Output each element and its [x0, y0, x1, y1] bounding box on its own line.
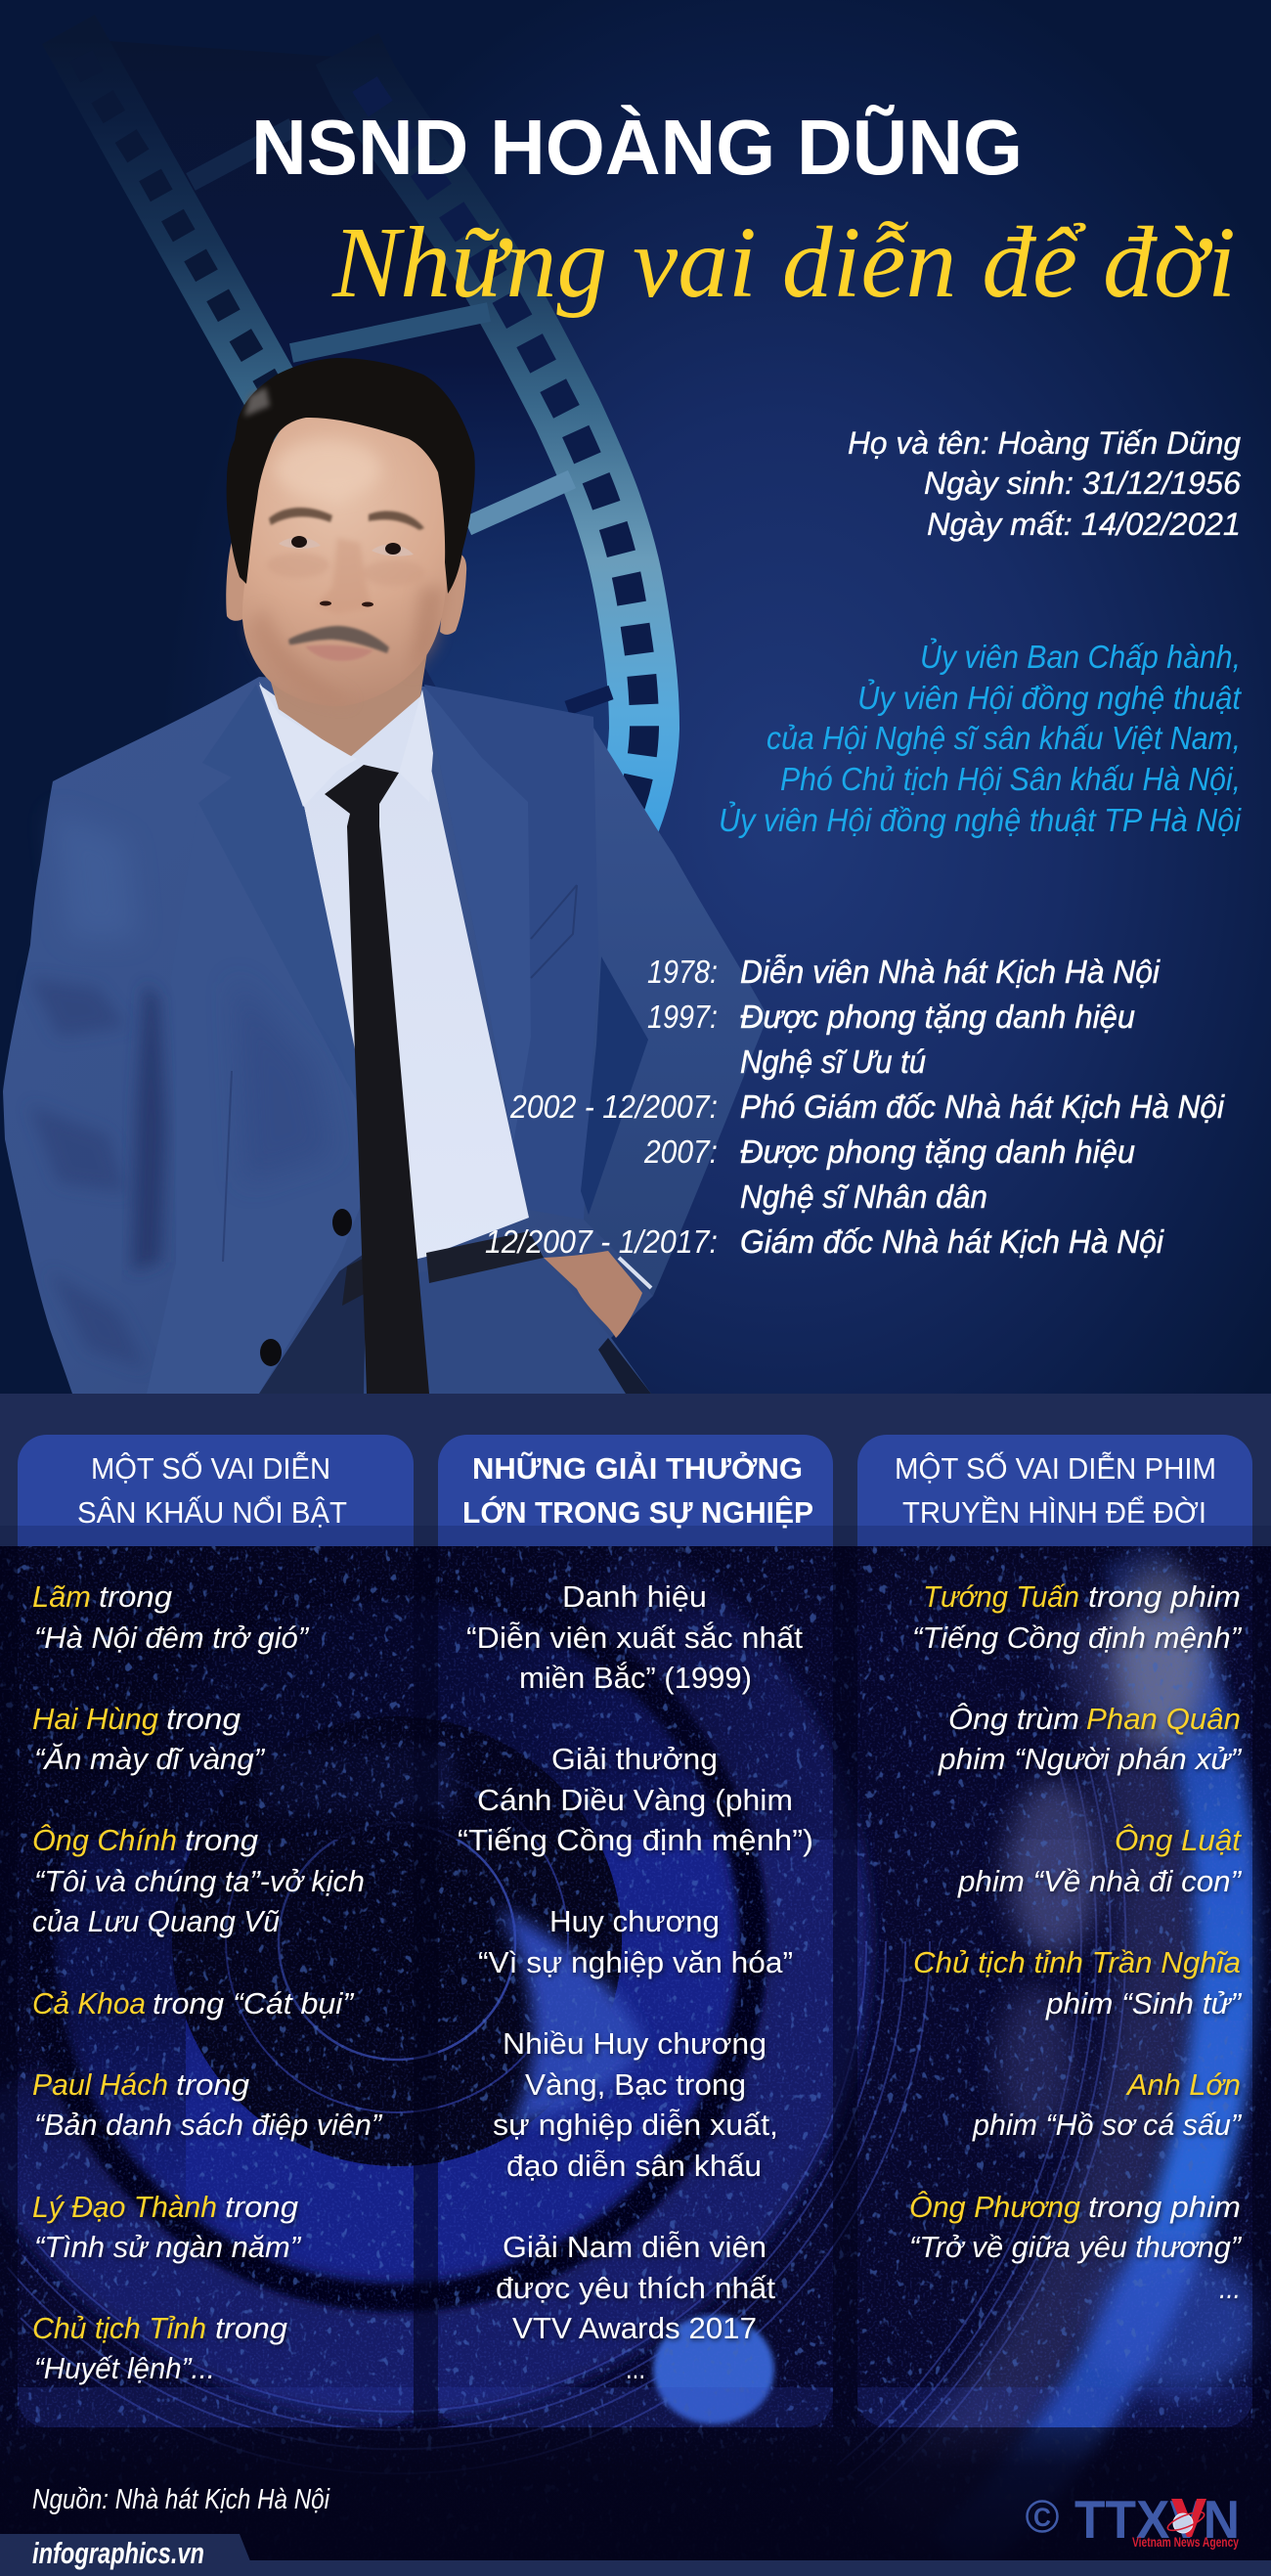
positions held: của Hội Nghệ sĩ sân khấu Việt Nam,	[767, 720, 1241, 756]
positions held	[719, 638, 1243, 838]
translucent column tails	[18, 2387, 1252, 2427]
arm gap showing background	[581, 956, 648, 1215]
awards list: “Vì sự nghiệp văn hóa”	[478, 1945, 793, 1979]
nose	[315, 538, 372, 614]
television roles list: ...	[1219, 2271, 1241, 2305]
face	[242, 391, 448, 706]
stage roles list: trong	[176, 2067, 249, 2102]
bottom strip	[0, 2560, 1271, 2576]
left lapel and jacket front	[150, 806, 332, 1394]
film strip decoration	[68, 29, 644, 831]
pants	[611, 1338, 650, 1393]
moustache	[288, 626, 389, 653]
subtitle: Những vai diễn để đời	[331, 206, 1236, 319]
awards list: Huy chương	[549, 1904, 720, 1938]
stage roles list: trong	[215, 2311, 287, 2345]
stage roles list: “Huyết lệnh”...	[34, 2351, 215, 2385]
television roles list: Tướng Tuấn	[923, 1579, 1079, 1614]
stage roles list: trong “Cát bụi”	[153, 1986, 355, 2021]
column gaps	[0, 1546, 1271, 2427]
awards list: Nhiều Huy chương	[503, 2026, 767, 2061]
career timeline: 1997:	[647, 999, 718, 1035]
stage roles list: Paul Hách	[32, 2067, 168, 2102]
television roles list: phim “Người phán xử”	[938, 1742, 1243, 1776]
stage roles list: trong	[225, 2190, 298, 2224]
awards list: Vàng, Bạc trong	[525, 2067, 746, 2102]
television roles list: Ông Phương	[909, 2190, 1080, 2224]
career timeline: 2007:	[643, 1133, 718, 1170]
positions held: Ủy viên Ban Chấp hành,	[920, 638, 1241, 675]
column headings: NHỮNG GIẢI THƯỞNG	[472, 1450, 803, 1486]
stage roles list: trong	[185, 1823, 258, 1857]
grey flare streaks	[1113, 1560, 1206, 1746]
column headings: SÂN KHẤU NỔI BẬT	[77, 1494, 347, 1530]
television roles list: trong phim	[1088, 2190, 1241, 2224]
career timeline	[485, 954, 1226, 1260]
jacket body and sleeves	[3, 677, 653, 1394]
awards list: Danh hiệu	[562, 1579, 707, 1614]
hero background	[0, 0, 1271, 1394]
shirt	[259, 685, 529, 1271]
portrait: Hoàng Dũng	[3, 358, 766, 1394]
stage roles list: “Hà Nội đêm trở gió”	[34, 1621, 310, 1655]
ears	[226, 538, 466, 635]
career timeline: Được phong tặng danh hiệu	[740, 1133, 1135, 1170]
career timeline: Giám đốc Nhà hát Kịch Hà Nội	[740, 1223, 1165, 1260]
television roles list	[909, 1579, 1243, 2305]
awards list: Cánh Diều Vàng (phim	[477, 1783, 793, 1817]
belt	[426, 1231, 544, 1283]
personal information	[848, 425, 1241, 542]
left sleeve folds	[37, 982, 131, 1355]
stage roles list: “Tôi và chúng ta”-vở kịch	[34, 1864, 365, 1898]
stage roles list: trong	[99, 1579, 172, 1614]
personal information: Họ và tên: Hoàng Tiến Dũng	[848, 425, 1241, 461]
stage roles list: của Lưu Quang Vũ	[32, 1904, 280, 1938]
lens background image	[0, 1546, 1271, 2560]
awards list: miền Bắc” (1999)	[519, 1661, 752, 1695]
stage roles list: “Tình sử ngàn năm”	[34, 2230, 302, 2264]
neck	[266, 645, 428, 758]
jacket buttons	[332, 1209, 352, 1236]
career timeline: Được phong tặng danh hiệu	[740, 999, 1135, 1035]
career timeline: 1978:	[647, 954, 718, 990]
awards list: Giải thưởng	[551, 1742, 718, 1776]
column headings: TRUYỀN HÌNH ĐỂ ĐỜI	[902, 1495, 1206, 1530]
column headings: MỘT SỐ VAI DIỄN	[91, 1450, 330, 1486]
awards list: đạo diễn sân khấu	[506, 2149, 762, 2183]
personal information: Ngày mất: 14/02/2021	[927, 507, 1241, 542]
awards list: Giải Nam diễn viên	[503, 2230, 767, 2264]
career timeline: Nghệ sĩ Nhân dân	[740, 1178, 987, 1215]
career timeline: Nghệ sĩ Ưu tú	[740, 1044, 926, 1080]
column headings	[77, 1450, 1216, 1530]
stage roles list: trong	[166, 1702, 241, 1736]
hair	[227, 358, 475, 594]
stage roles list: Lý Đạo Thành	[32, 2190, 217, 2224]
arm and body shadow	[132, 983, 166, 1271]
awards list: ...	[626, 2351, 645, 2385]
column headings: LỚN TRONG SỰ NGHIỆP	[462, 1494, 813, 1530]
stage roles list: Cả Khoa	[32, 1986, 146, 2021]
eyebrows	[269, 508, 424, 530]
logo: TTXVN: Vietnam News Agency	[1132, 2535, 1239, 2550]
television roles list: trong phim	[1088, 1579, 1241, 1614]
television roles list: “Tiếng Cồng định mệnh”	[912, 1621, 1243, 1655]
television roles list: phim “Về nhà đi con”	[957, 1864, 1243, 1898]
mouth	[305, 645, 373, 661]
light speckles	[0, 1546, 1271, 2560]
tie	[325, 765, 429, 1394]
positions held: Ủy viên Hội đồng nghệ thuật	[857, 679, 1243, 716]
logo: TTXVN: C	[1033, 2503, 1051, 2532]
hand	[544, 1251, 642, 1338]
career timeline: 2002 - 12/2007:	[509, 1088, 718, 1125]
awards list: được yêu thích nhất	[496, 2271, 775, 2305]
footer tab: infographics.vn	[32, 2536, 204, 2570]
career timeline: Phó Giám đốc Nhà hát Kịch Hà Nội	[740, 1088, 1226, 1125]
large blue lens band	[120, 1665, 674, 2218]
right lapel and jacket front	[424, 685, 598, 1220]
television roles list: Ông trùm	[948, 1702, 1079, 1736]
lower band	[0, 1394, 1271, 1546]
lower right glow	[1095, 2249, 1261, 2396]
awards list	[458, 1579, 813, 2385]
column headings: MỘT SỐ VAI DIỄN PHIM	[895, 1450, 1216, 1486]
outer rings	[8, 1753, 1125, 2500]
positions held: Phó Chủ tịch Hội Sân khấu Hà Nội,	[780, 761, 1241, 797]
stage roles list: “Bản danh sách điệp viên”	[34, 2108, 383, 2142]
career timeline: 12/2007 - 1/2017:	[485, 1223, 718, 1260]
face shading	[249, 606, 352, 702]
television roles list: phim “Sinh tử”	[1045, 1986, 1243, 2021]
television roles list: phim “Hồ sơ cá sấu”	[972, 2108, 1243, 2142]
bottom bright spot	[653, 2315, 774, 2424]
personal information: Ngày sinh: 31/12/1956	[924, 466, 1241, 501]
awards list: sự nghiệp diễn xuất,	[493, 2108, 778, 2142]
stage roles list: Chủ tịch Tỉnh	[32, 2311, 206, 2345]
crescent reflection	[499, 1907, 645, 2127]
awards list: VTV Awards 2017	[512, 2311, 757, 2345]
stage roles list: Ông Chính	[32, 1823, 177, 1857]
television roles list: Ông Luật	[1115, 1823, 1242, 1857]
awards list: “Diễn viên xuất sắc nhất	[466, 1621, 803, 1655]
footer darkening	[0, 2427, 1271, 2560]
eyes	[279, 537, 414, 556]
source note: Nguồn: Nhà hát Kịch Hà Nội	[32, 2484, 330, 2515]
awards list: “Tiếng Cồng định mệnh”)	[458, 1823, 813, 1857]
television roles list: Chủ tịch tỉnh Trần Nghĩa	[913, 1945, 1241, 1979]
title: NSND HOÀNG DŨNG	[251, 104, 1023, 191]
stage roles list: Lãm	[32, 1579, 91, 1614]
positions held: Ủy viên Hội đồng nghệ thuật TP Hà Nội	[719, 801, 1243, 838]
logo: TTXVN: TTXVN	[1074, 2489, 1240, 2550]
stage roles list	[32, 1579, 383, 2385]
television roles list: Phan Quân	[1086, 1702, 1241, 1736]
collar	[259, 682, 433, 807]
column header cards	[18, 1435, 1252, 1546]
highlight above lens	[259, 1746, 455, 1814]
television roles list: “Trở về giữa yêu thương”	[909, 2230, 1243, 2264]
television roles list: Anh Lớn	[1125, 2067, 1241, 2102]
stage roles list: “Ăn mày dĩ vàng”	[34, 1742, 266, 1776]
career timeline: Diễn viên Nhà hát Kịch Hà Nội	[740, 954, 1161, 990]
right bright arc	[887, 1619, 1160, 2526]
stage roles list: Hai Hùng	[32, 1702, 158, 1736]
right sleeve	[577, 717, 766, 1296]
